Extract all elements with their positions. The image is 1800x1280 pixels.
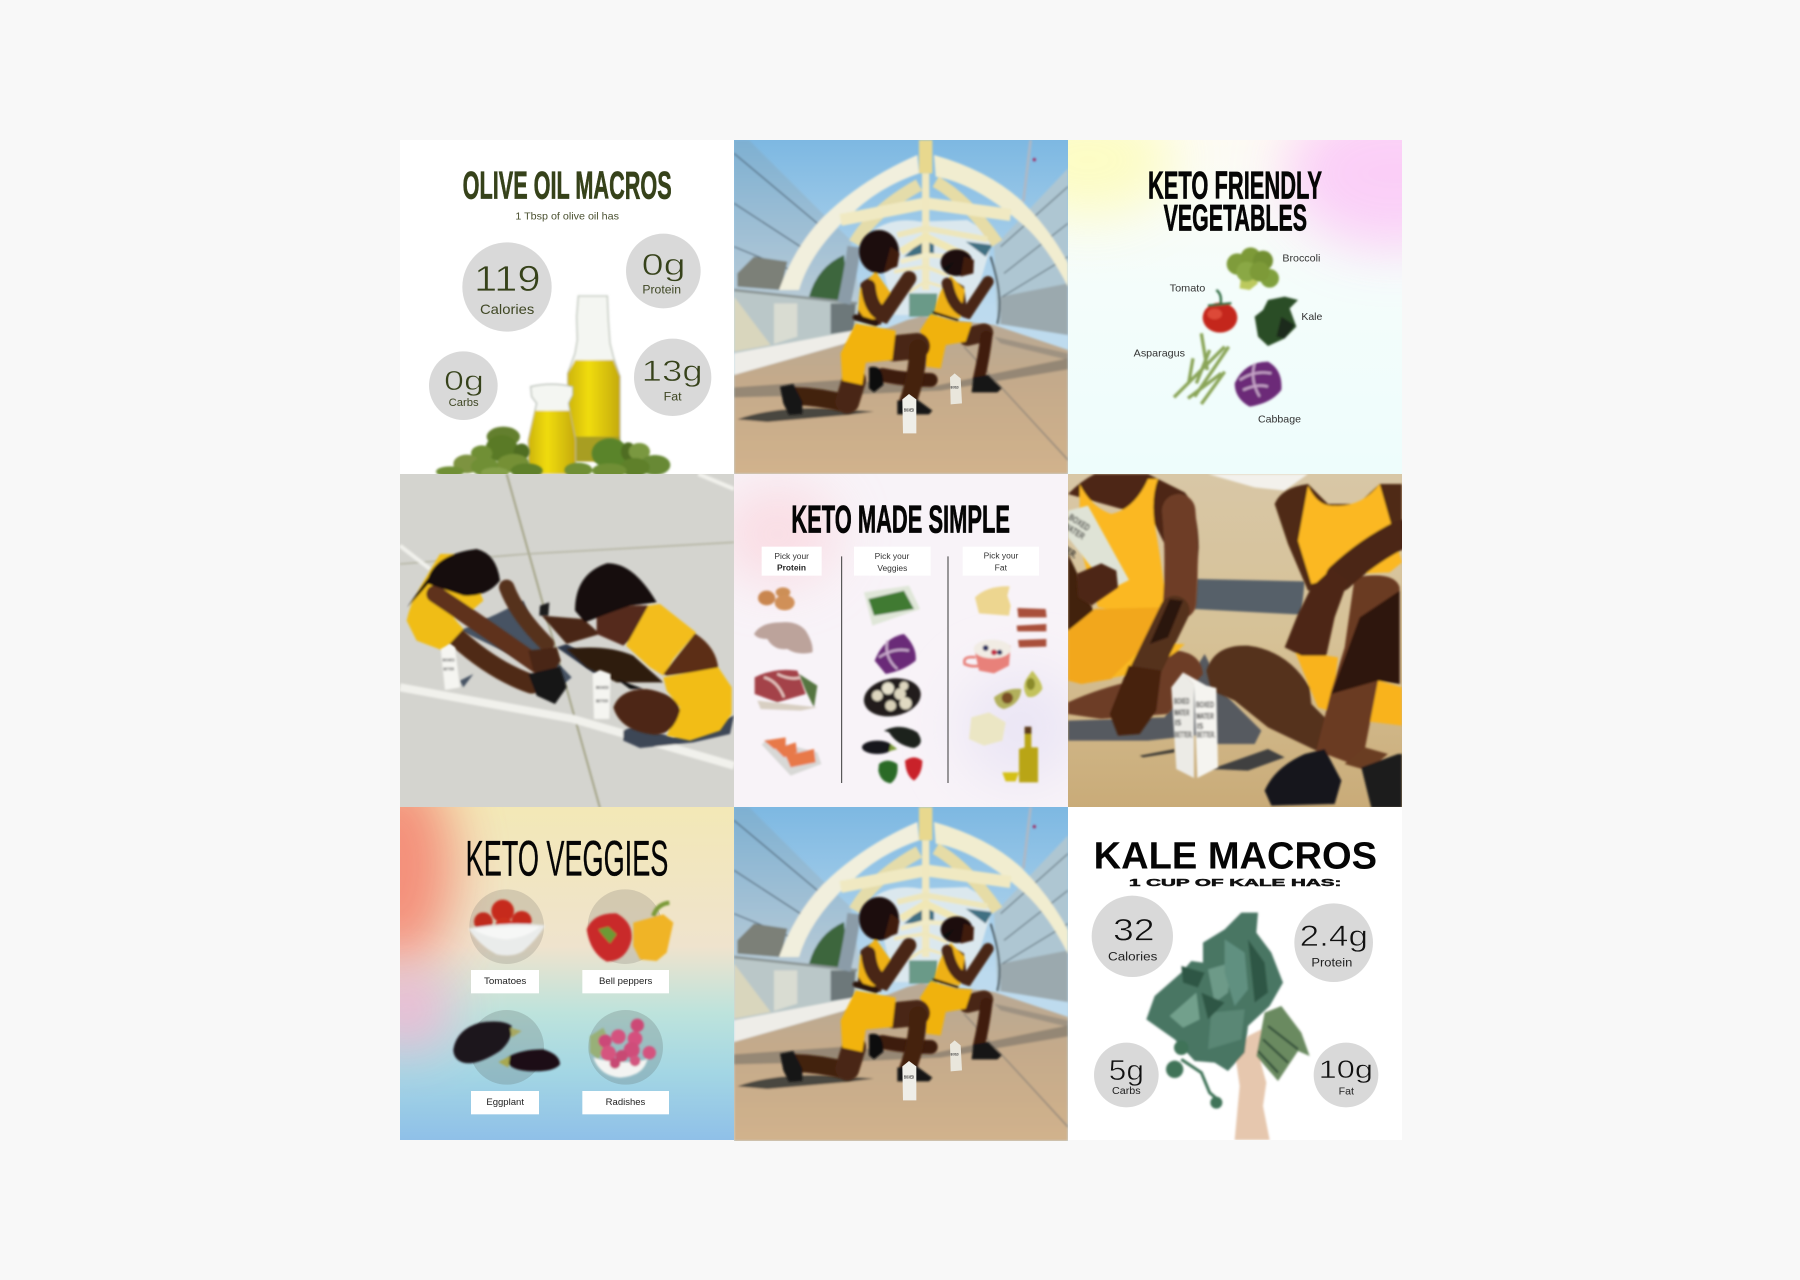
stat: carbs: [429, 351, 498, 420]
subtitle: 1 Tbsp of olive oil has: [515, 211, 619, 222]
eggplant image: [453, 1010, 560, 1085]
icon: carton: [902, 373, 962, 433]
vegetable: cabbage: [1235, 362, 1281, 407]
floor: [734, 317, 1068, 474]
food: eggplants and peppers: [862, 727, 922, 783]
icon: carton right: BETTER: [596, 698, 608, 703]
illustration: small oil jar: [528, 384, 576, 474]
food: avocado: [994, 671, 1042, 709]
label: Radishes: [582, 1091, 669, 1114]
figure: right woman stretching: [539, 563, 732, 741]
food: olive oil bottle: [1002, 727, 1038, 782]
label: Broccoli: Broccoli: [1282, 254, 1320, 265]
panel: keto veggies: [340, 766, 734, 1140]
icon: carton held: WATER: [1061, 521, 1087, 542]
icon: carton held: IS: [1056, 529, 1068, 542]
illustration: kale bunch in hand: [1146, 913, 1310, 1140]
stat: calories: Calories: [1108, 949, 1157, 963]
stat: protein: [626, 234, 701, 308]
title: kale macros: KALE MACROS: [1094, 835, 1377, 877]
figure: right seated woman: [1206, 484, 1402, 808]
icon: carton held: BOXED: [1067, 512, 1092, 533]
arch frame: [779, 155, 919, 290]
right glass wall: [994, 168, 1068, 335]
label: Cabbage: Cabbage: [1258, 415, 1301, 426]
column header: veggies: Pick your: [875, 552, 910, 561]
stat: protein: 0g: [642, 248, 686, 282]
icon: carton on ground: IS: [1175, 718, 1182, 728]
vegetable: kale: [1255, 297, 1298, 346]
vegetable: asparagus: [1174, 333, 1229, 404]
label: Tomatoes: [471, 970, 539, 993]
stat: fat: [634, 339, 711, 416]
icon: carton right: BOXED: [596, 685, 609, 690]
stat: calories: [462, 242, 552, 332]
stat: fat: [1314, 1043, 1378, 1107]
stat: fat: 10g: [1319, 1056, 1373, 1084]
illustration: olives: [436, 427, 670, 478]
label: Tomato: Tomato: [1170, 284, 1205, 295]
column header: veggies: Veggies: [877, 564, 907, 573]
photo: two women stretching on concrete: [400, 474, 734, 808]
stat: carbs: [1094, 1043, 1159, 1107]
stat: fat: 13g: [642, 355, 703, 388]
radishes image: [588, 1010, 663, 1085]
food: red cabbage: [875, 634, 916, 674]
icon: carton left: BETTER: [443, 667, 454, 672]
icon: carton on ground: BOXED: [1196, 699, 1214, 709]
subtitle: 1 CUP OF KALE HAS:: [1129, 878, 1341, 889]
illustration: olive oil bottle: [568, 296, 620, 462]
column header: protein: [762, 547, 822, 576]
title: keto friendly vegetables: [1149, 171, 1322, 232]
stat: calories: 119: [474, 258, 541, 299]
far structure: [874, 220, 994, 315]
vegetable: tomato: [1203, 290, 1237, 333]
stat: carbs: Carbs: [449, 397, 479, 409]
food: eggs: [758, 587, 795, 610]
title: keto veggies: KETO VEGGIES: [466, 830, 668, 886]
bell peppers image: [587, 889, 673, 964]
icon: carton: BOXED: [904, 408, 914, 413]
icon: carton on ground: BOXED: [1174, 696, 1189, 706]
food: cheese: [975, 586, 1011, 616]
label: Tomatoes: Tomatoes: [484, 976, 527, 986]
vegetable: broccoli: [1227, 247, 1279, 290]
panel: kale macros: [1068, 806, 1402, 1140]
column header: protein: Protein: [777, 564, 806, 573]
label: Eggplant: [471, 1091, 539, 1114]
figure: rear woman lunging: [869, 249, 1002, 392]
stat: protein: [1294, 903, 1373, 982]
food: cauliflower: [861, 674, 924, 721]
stat: fat: Fat: [1339, 1086, 1354, 1097]
panel: olive oil macros: [429, 171, 712, 474]
panel: keto made simple: [734, 474, 1068, 797]
stat: carbs: 0g: [444, 365, 484, 396]
food: spinach tray: [864, 586, 920, 626]
panel: keto friendly vegetables: [1068, 140, 1402, 474]
title: keto friendly vegetables: KETO FRIENDLY: [1148, 164, 1322, 207]
title: olive oil macros: OLIVE OIL MACROS: [463, 164, 672, 207]
food: chicken: [754, 622, 813, 653]
left glass wall: [734, 140, 861, 303]
figure: left woman stretching: [407, 549, 567, 704]
label: Bell peppers: Bell peppers: [599, 976, 653, 986]
icon: carton on ground: IS: [1197, 721, 1204, 731]
icon: carton right: [593, 670, 611, 719]
column header: fat: Fat: [995, 563, 1008, 572]
photo: two women lunging on a bridge: [734, 140, 1068, 474]
icon: carton on ground: [1171, 672, 1218, 778]
icon: carton held: [1051, 506, 1129, 592]
icon: carton: BOXED: [951, 385, 959, 389]
label: Kale: Kale: [1301, 312, 1322, 323]
shadows: [460, 601, 572, 687]
stat: calories: Calories: [480, 301, 534, 317]
stat: fat: Fat: [664, 390, 682, 404]
food: bacon: [1017, 608, 1047, 647]
stat: carbs: Carbs: [1112, 1086, 1141, 1097]
label: Eggplant: Eggplant: [486, 1097, 525, 1107]
icon: carton on ground: BETTER.: [1175, 729, 1193, 739]
hand on carton: [1076, 563, 1118, 606]
tomatoes image: [468, 889, 545, 964]
food: butter: [969, 712, 1006, 746]
food: yogurt bowl: [964, 640, 1011, 673]
icon: carton on ground: WATER: [1196, 711, 1214, 721]
stat: protein: Protein: [642, 283, 681, 296]
title: keto made simple: KETO MADE SIMPLE: [791, 498, 1010, 541]
stat: protein: Protein: [1311, 957, 1352, 970]
photo: two women lunging on a bridge (repeat): [734, 807, 1068, 1141]
column header: fat: Pick your: [984, 552, 1019, 561]
food: steak: [755, 670, 817, 711]
column header: fat: [963, 547, 1039, 576]
icon: carton on ground: WATER: [1174, 708, 1190, 718]
label: Asparagus: Asparagus: [1134, 349, 1185, 360]
figure: front woman lunging: [780, 230, 932, 415]
icon: carton left: [441, 644, 460, 690]
icon: carton left: BOXED: [443, 657, 455, 662]
title: keto friendly vegetables: VEGETABLES: [1164, 197, 1307, 239]
stat: carbs: 5g: [1109, 1055, 1144, 1087]
stat: protein: 2.4g: [1300, 920, 1368, 953]
food: salmon: [762, 737, 821, 776]
stat: calories: [1092, 896, 1173, 977]
stat: calories: 32: [1113, 911, 1155, 947]
label: Radishes: Radishes: [606, 1097, 646, 1107]
column header: protein: Pick your: [774, 552, 809, 561]
photo: two seated women with cartons: [1051, 474, 1402, 808]
figure: left seated woman: [1068, 474, 1203, 736]
icon: carton held: BETTER.: [1051, 538, 1079, 560]
label: Bell peppers: [582, 970, 669, 993]
column header: veggies: [854, 547, 931, 576]
icon: carton on ground: BETTER.: [1197, 729, 1215, 739]
